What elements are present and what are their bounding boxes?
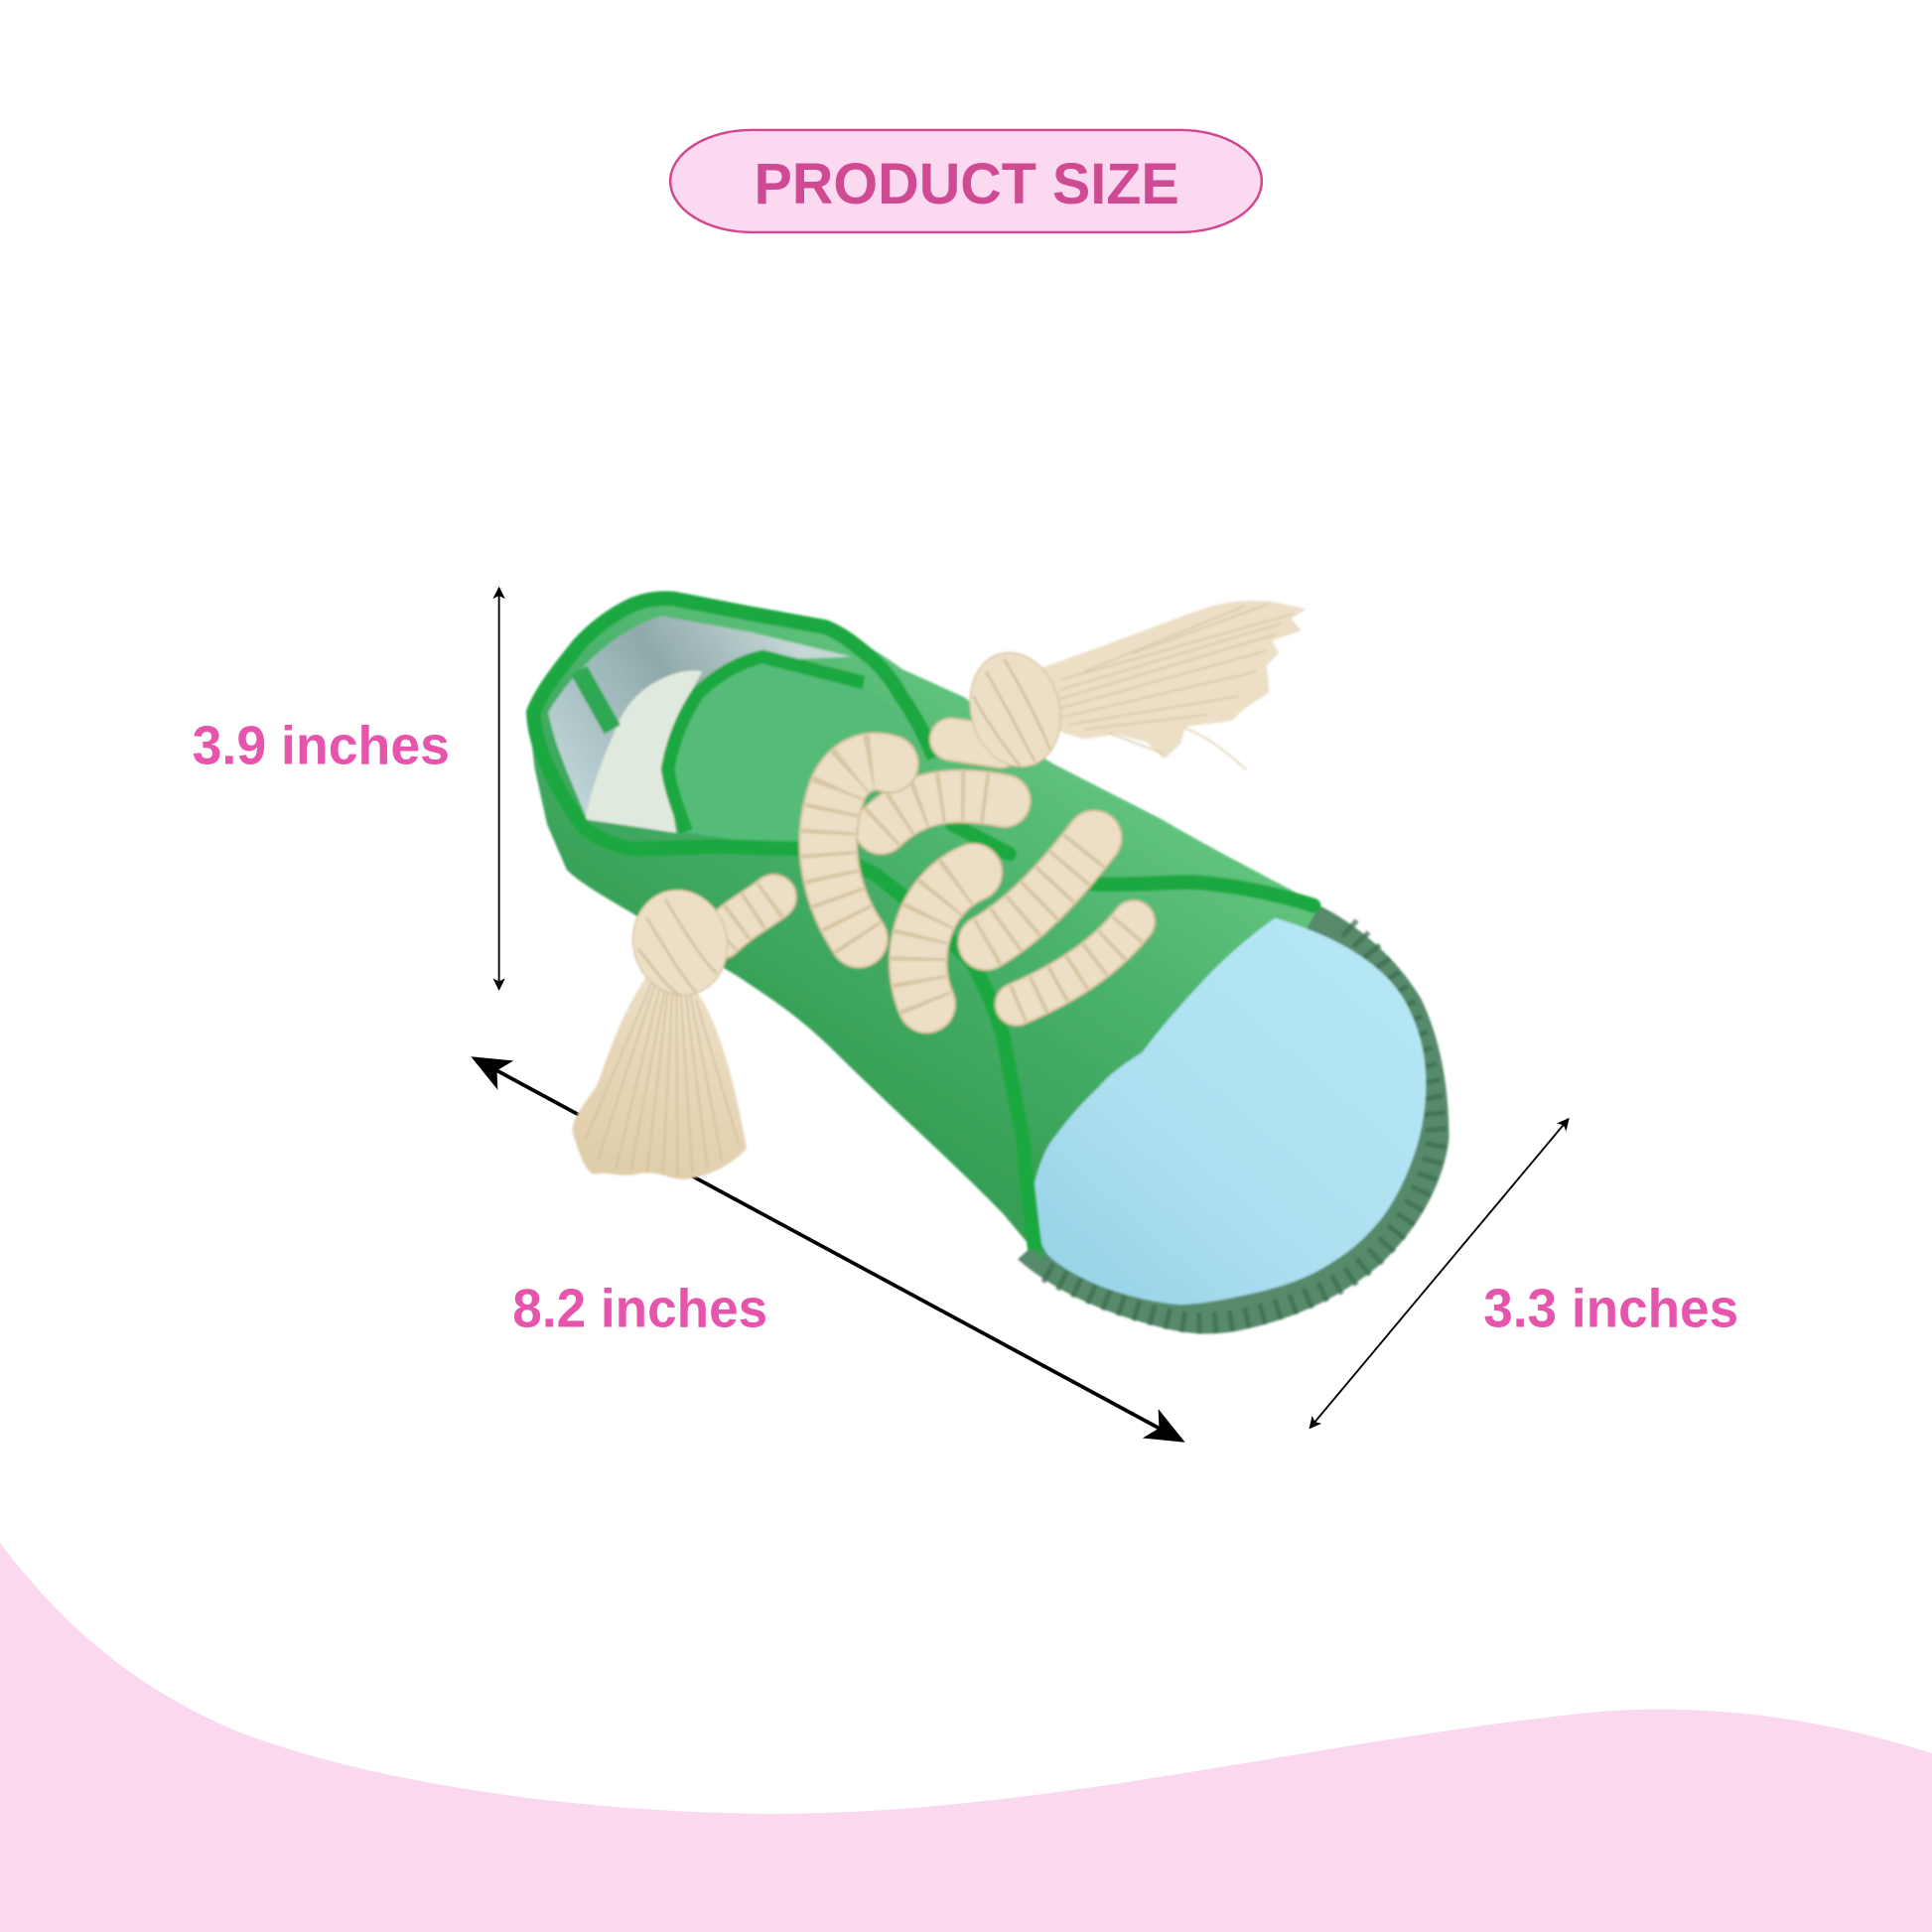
toe strap piping bbox=[952, 824, 1313, 905]
upper tassel bbox=[1041, 601, 1307, 770]
rope: lace to lower knot bbox=[721, 897, 773, 936]
bottom wave background bbox=[0, 1543, 1932, 1932]
title pill bbox=[670, 130, 1262, 232]
shoe canvas body bbox=[528, 594, 1319, 1259]
tongue piping bbox=[668, 656, 864, 832]
rope: lace centre bbox=[918, 838, 1094, 1004]
rope: lace right lower bbox=[1017, 921, 1134, 1004]
product illustration: shoe toy bbox=[528, 594, 1449, 1333]
insole bbox=[586, 670, 702, 833]
lower tassel bbox=[573, 966, 747, 1179]
lacing piping bbox=[533, 599, 1035, 1249]
arrow: length bbox=[475, 1058, 1181, 1441]
label: width: 3.3 inches bbox=[1483, 1279, 1738, 1339]
heel elastic strip bbox=[579, 670, 613, 730]
title pill: PRODUCT SIZE bbox=[755, 152, 1179, 216]
toe cap bbox=[1032, 918, 1426, 1305]
label: length: 8.2 inches bbox=[512, 1279, 767, 1339]
shoe sole bbox=[1018, 905, 1449, 1333]
rope: lace upper bbox=[828, 740, 1004, 939]
arrow: height bbox=[498, 588, 500, 990]
label: height: 3.9 inches bbox=[193, 715, 450, 775]
lower knot bbox=[621, 880, 739, 1006]
upper knot bbox=[957, 642, 1073, 777]
tongue bbox=[673, 659, 936, 850]
arrow: width bbox=[1310, 1119, 1569, 1428]
collar interior bbox=[548, 617, 852, 828]
